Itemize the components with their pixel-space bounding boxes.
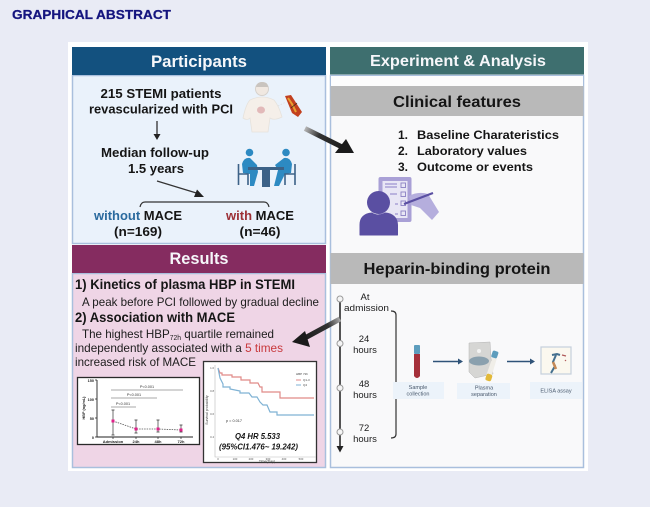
chart: survival curve: Q4 <box>303 383 307 387</box>
chart: HBP kinetics: P<0.001 <box>116 402 130 406</box>
heading: experiment and analysis: Experiment & Analysis <box>370 53 546 70</box>
chart: HBP kinetics: 50 <box>90 417 94 421</box>
step: sample collection <box>393 345 444 399</box>
chart: survival curve: Q1-3 <box>303 378 310 382</box>
text: follow-up: Median follow-up <box>101 146 209 160</box>
icon: blood vessel <box>285 95 302 117</box>
chart: HBP kinetics: 24h <box>133 439 140 444</box>
timeline: admission <box>344 303 389 314</box>
text: without MACE <box>93 209 182 239</box>
text: patients <box>89 87 233 116</box>
panel: results <box>72 245 326 468</box>
arrow: sample to plasma <box>433 358 463 364</box>
chart: HBP kinetics: 150 <box>88 379 94 383</box>
text: association: quartile remained <box>181 327 274 341</box>
panel: experiment and analysis <box>330 47 584 468</box>
step: plasma separation: separation <box>471 392 497 398</box>
step: sample collection: Sample <box>409 385 427 391</box>
chart: HBP kinetics: 48h <box>155 439 162 444</box>
text: without MACE: without MACE <box>93 209 182 223</box>
heading: clinical features <box>330 86 584 116</box>
chart: survival curve <box>204 362 316 464</box>
text: patients: 215 STEMI patients <box>100 87 222 101</box>
text: without MACE: (n=169) <box>114 225 162 239</box>
list: clinical features: Baseline Charateristics <box>417 128 559 142</box>
chart: HBP kinetics: 100 <box>88 398 94 402</box>
text: patients: revascularized with PCI <box>89 102 233 116</box>
chart: HBP kinetics: P<0.001 <box>127 393 141 397</box>
arrow: participants to clinical features <box>305 128 354 153</box>
text: association: The highest HBP <box>82 327 173 341</box>
timeline: hours <box>353 345 377 356</box>
heading: heparin-binding protein: Heparin-binding protein <box>364 261 550 278</box>
chart: survival curve: p = 0.017 <box>226 419 242 423</box>
heading: clinical features: Clinical features <box>393 94 521 111</box>
step: plasma separation: Plasma <box>475 386 494 392</box>
panel: participants <box>72 47 326 244</box>
chart: survival curve: 0.8 <box>210 389 214 393</box>
heading: participants: Participants <box>151 53 247 71</box>
chart: survival curve: HBP 72h <box>296 372 308 376</box>
timeline <box>336 292 396 452</box>
icon: consultation <box>238 149 295 187</box>
text: follow-up <box>101 146 209 176</box>
heading: heparin-binding protein <box>330 253 584 284</box>
list: clinical features: Outcome or events <box>417 160 533 174</box>
heading: experiment and analysis <box>330 47 584 74</box>
arrow: heparin-binding protein to results <box>292 319 340 347</box>
chart: HBP kinetics: Admission <box>103 439 124 444</box>
text: kinetics <box>75 276 319 309</box>
text: with MACE: with MACE <box>225 209 294 223</box>
chart: survival curve: 1.0 <box>210 366 214 370</box>
chart: HBP kinetics: 72h <box>178 439 185 444</box>
timeline: hours <box>353 434 377 445</box>
chart: HBP kinetics: HBP (ng/mL) <box>82 396 86 419</box>
timeline: At <box>361 292 370 303</box>
text: association: 2) Association with MACE <box>75 309 235 325</box>
chart: HBP kinetics: 0 <box>92 436 94 440</box>
step: plasma separation <box>457 342 510 399</box>
list: clinical features: 3. <box>398 160 408 174</box>
heading: results <box>72 245 326 273</box>
text: association: increased risk of MACE <box>75 355 196 369</box>
arrow: patients to follow-up <box>154 121 160 140</box>
text: kinetics: 1) Kinetics of plasma HBP in STEMI <box>75 276 295 292</box>
heading: participants <box>72 47 326 75</box>
text: kinetics: A peak before PCI followed by gradual decline <box>82 295 319 309</box>
step: ELISA assay: ELISA assay <box>540 388 572 394</box>
chart: survival curve: Time(Day) <box>259 460 275 464</box>
band: white gap <box>331 76 583 86</box>
text: association: independently associated with a 5 times <box>75 341 283 355</box>
bracket: groups <box>140 202 269 207</box>
text: with MACE <box>225 209 294 239</box>
icon: person filling checklist <box>360 177 439 235</box>
chart: HBP kinetics <box>78 378 200 444</box>
chart: survival curve: 300 <box>266 457 271 461</box>
text: association: 72h <box>170 335 181 342</box>
list: clinical features: 2. <box>398 144 408 158</box>
timeline: 72 <box>359 423 369 434</box>
timeline: hours <box>353 390 377 401</box>
timeline: 48 <box>359 379 369 390</box>
chart: survival curve: 200 <box>249 457 254 461</box>
chart: survival curve: Q4 HR 5.533 <box>235 432 281 441</box>
chart: survival curve: (95%CI1.476~ 19.242) <box>219 442 298 452</box>
chart: survival curve: 0.4 <box>210 435 214 439</box>
chart: HBP kinetics: P<0.001 <box>140 385 154 389</box>
timeline: 24 <box>359 334 369 345</box>
white backing card <box>68 42 588 471</box>
chart: survival curve: 500 <box>299 457 304 461</box>
text: with MACE: (n=46) <box>240 225 280 239</box>
chart: survival curve: 400 <box>282 457 287 461</box>
chart: survival curve: Survival probability <box>205 395 209 425</box>
title: GRAPHICAL ABSTRACT <box>12 8 171 22</box>
text: association <box>75 309 283 369</box>
arrow: follow-up to groups <box>157 181 204 197</box>
chart: survival curve: 100 <box>233 457 238 461</box>
text: follow-up: 1.5 years <box>128 162 184 176</box>
list: clinical features: 1. <box>398 128 408 142</box>
heading: results: Results <box>170 250 228 268</box>
chart: survival curve: 0.6 <box>210 412 214 416</box>
icon: patient with chest pain <box>243 82 286 132</box>
chart: survival curve: 0 <box>217 457 219 461</box>
list: clinical features: Laboratory values <box>417 144 527 158</box>
arrow: plasma to ELISA <box>507 358 535 364</box>
step: ELISA assay <box>530 347 582 399</box>
list: clinical features <box>398 128 559 174</box>
step: sample collection: collection <box>407 392 429 398</box>
